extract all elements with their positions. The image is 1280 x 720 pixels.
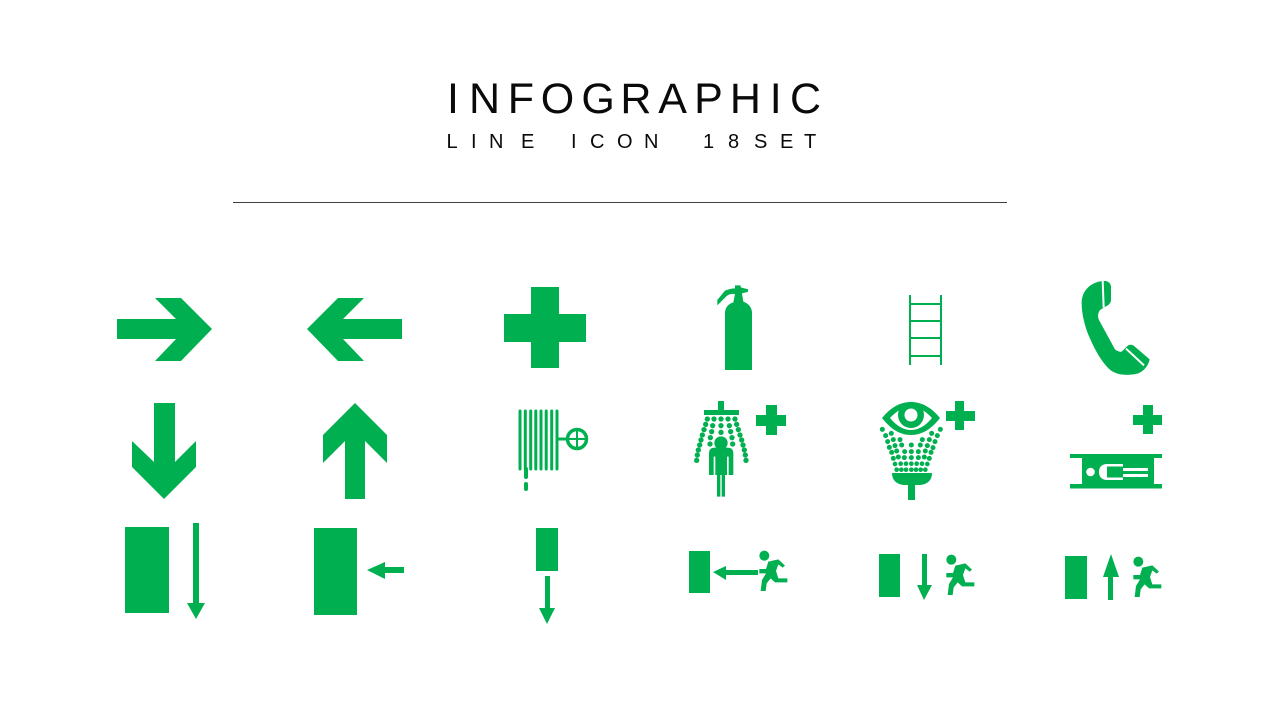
icon: ladder	[910, 295, 941, 365]
icon: medical cross	[504, 287, 586, 368]
subtitle: LINE ICON 18SET	[446, 131, 816, 153]
icon grid	[117, 280, 1162, 624]
icon: running person to door left	[689, 551, 787, 593]
icon: door with down arrow	[125, 523, 205, 619]
icon: eye wash station	[880, 401, 975, 500]
icon: up arrow	[323, 403, 387, 499]
title: INFOGRAPHIC	[447, 75, 821, 123]
icon: emergency shower	[694, 401, 786, 497]
icon: shower plus	[756, 405, 786, 435]
icon: fire extinguisher	[717, 285, 752, 370]
icon: eye wash plus	[946, 401, 975, 430]
icon: door with left arrow	[314, 528, 404, 615]
icon: running person with down arrow	[879, 554, 974, 600]
icon: fire hose reel	[520, 411, 586, 489]
icon: down arrow	[132, 403, 196, 499]
icon: stretcher plus	[1133, 405, 1162, 434]
icon: right arrow	[117, 298, 212, 361]
icon: telephone	[1082, 280, 1150, 375]
icon: left arrow	[307, 298, 402, 361]
icon: stretcher	[1070, 405, 1162, 488]
icon: small door with down arrow	[536, 528, 558, 624]
icon: running person with up arrow	[1065, 554, 1161, 600]
